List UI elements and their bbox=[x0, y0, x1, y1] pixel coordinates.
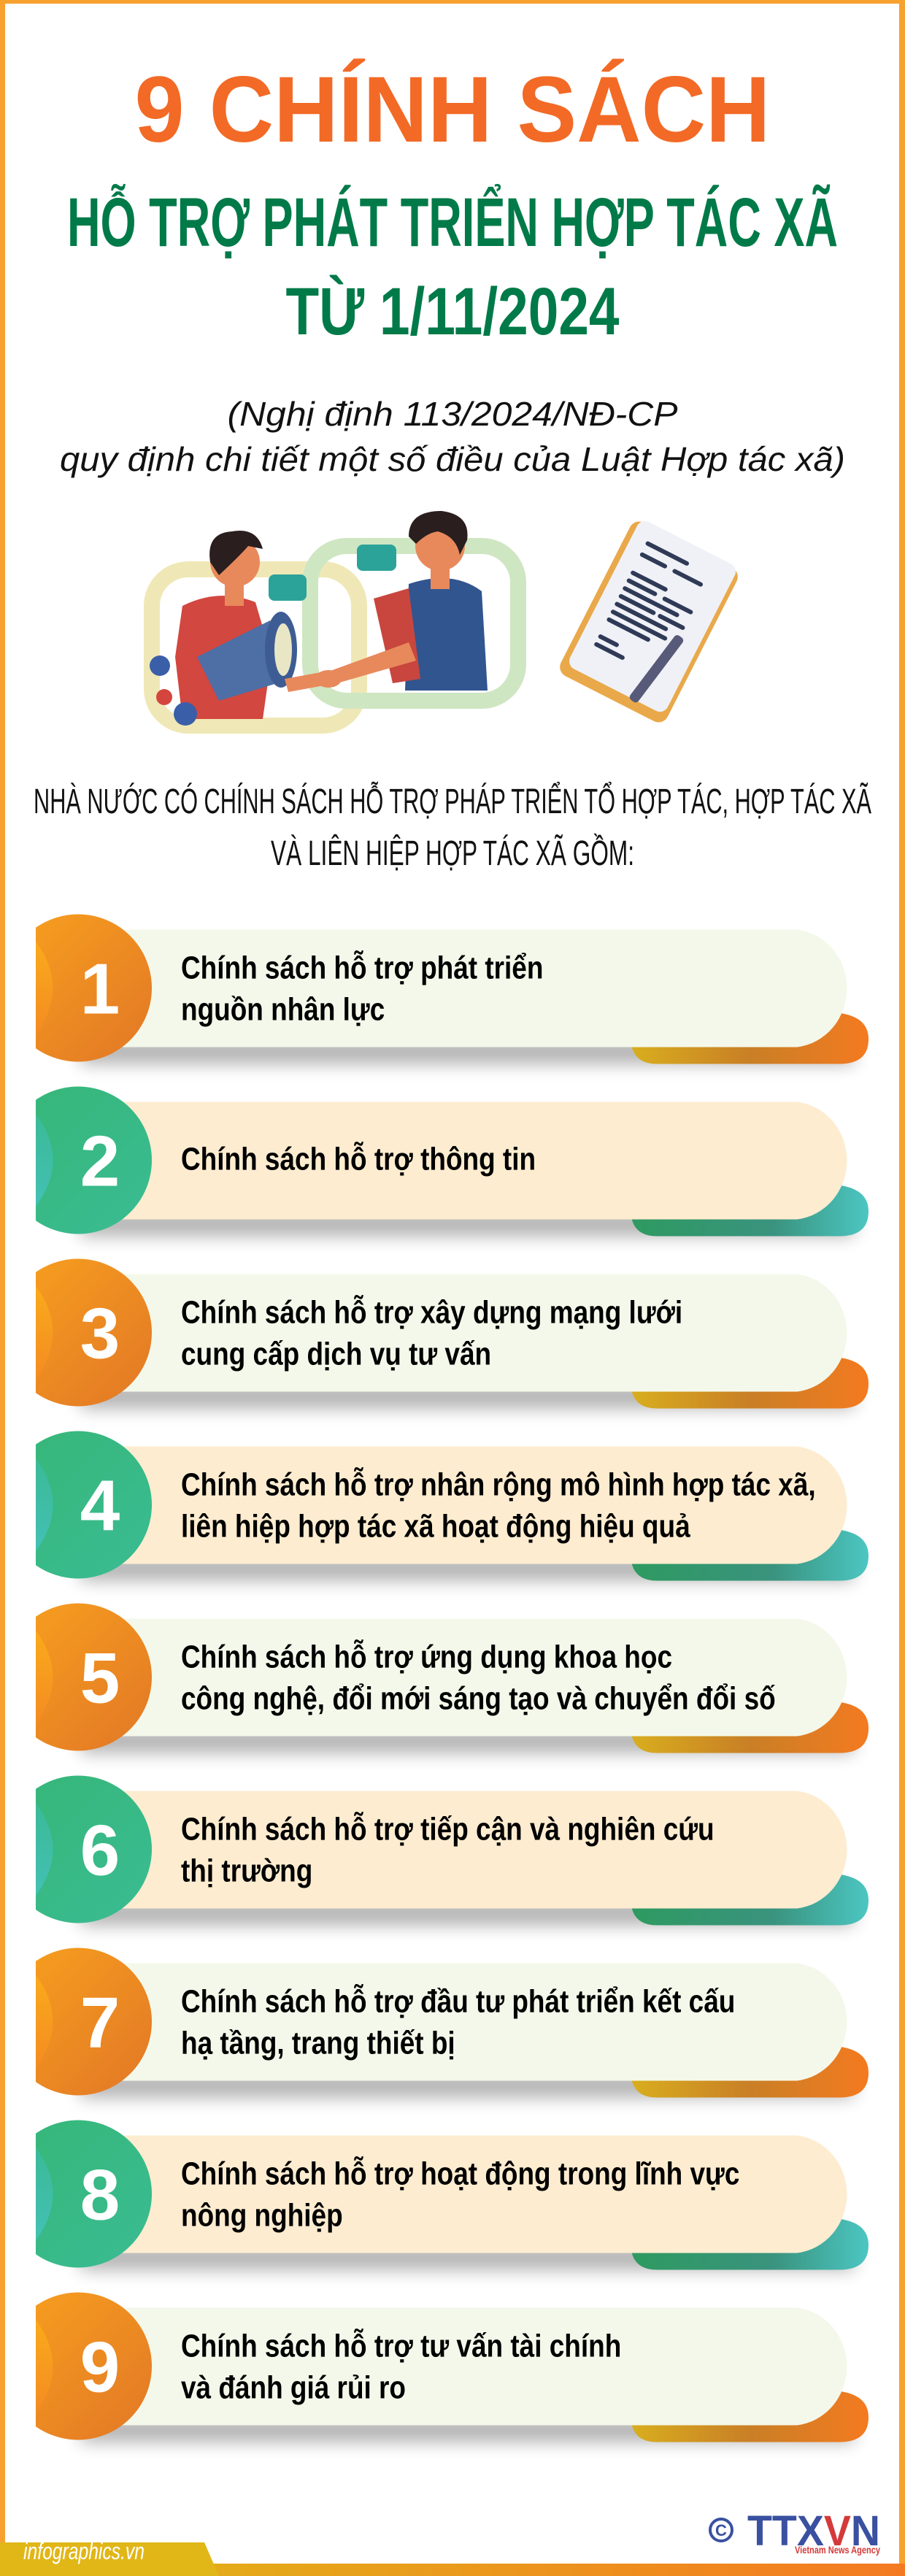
item 7: hạ tầng, trang thiết bị bbox=[181, 2024, 455, 2061]
item 1: Chính sách hỗ trợ phát triển bbox=[181, 949, 543, 985]
logo: TTXVN: TTXVN bbox=[747, 2507, 880, 2555]
item 8: 8 bbox=[80, 2155, 120, 2235]
logo: TTXVN: Vietnam News Agency bbox=[795, 2544, 880, 2556]
subtitle: (Nghị định 113/2024/NĐ-CP bbox=[228, 395, 678, 433]
like icons bbox=[150, 655, 170, 676]
item 8 bbox=[4, 2120, 869, 2270]
item 4 bbox=[4, 1431, 869, 1581]
item 9: 9 bbox=[80, 2327, 120, 2407]
item 4: Chính sách hỗ trợ nhân rộng mô hình hợp tác xã, bbox=[181, 1466, 816, 1502]
item 6 bbox=[4, 1775, 869, 1926]
item 4: 4 bbox=[80, 1466, 120, 1546]
item 3: cung cấp dịch vụ tư vấn bbox=[181, 1335, 491, 1372]
footer bar: infographics.vn bbox=[23, 2538, 145, 2564]
item 6: 6 bbox=[80, 1810, 120, 1891]
item 7: 7 bbox=[80, 1983, 120, 2063]
subtitle bbox=[60, 395, 845, 478]
item 2: 2 bbox=[80, 1121, 120, 1202]
title: 9 CHÍNH SÁCH bbox=[134, 58, 771, 162]
intro text bbox=[34, 781, 871, 873]
item 7: Chính sách hỗ trợ đầu tư phát triển kết cấu bbox=[181, 1983, 735, 2019]
speech bubbles bbox=[269, 574, 307, 601]
item 1: nguồn nhân lực bbox=[181, 991, 385, 1027]
logo: TTXVN: C bbox=[715, 2521, 727, 2540]
item 8: Chính sách hỗ trợ hoạt động trong lĩnh vực bbox=[181, 2155, 739, 2191]
item 1 bbox=[4, 914, 869, 1064]
subtitle: quy định chi tiết một số điều của Luật Hợp tác xã) bbox=[60, 440, 845, 478]
item 3: Chính sách hỗ trợ xây dựng mạng lưới bbox=[181, 1293, 682, 1330]
item 3 bbox=[4, 1258, 869, 1409]
right man bbox=[405, 578, 488, 691]
left man bbox=[175, 596, 272, 719]
item 8: nông nghiệp bbox=[181, 2196, 343, 2233]
item 1: 1 bbox=[80, 949, 120, 1029]
item 6: thị trường bbox=[181, 1852, 312, 1888]
item 9 bbox=[4, 2292, 869, 2442]
item 5: 5 bbox=[80, 1638, 120, 1718]
item 6: Chính sách hỗ trợ tiếp cận và nghiên cứu bbox=[181, 1810, 715, 1847]
item 2 bbox=[4, 1086, 869, 1237]
item 5: Chính sách hỗ trợ ứng dụng khoa học bbox=[181, 1638, 672, 1675]
intro text: VÀ LIÊN HIỆP HỢP TÁC XÃ GỒM: bbox=[271, 833, 634, 873]
illustration: two people shaking hands bbox=[150, 511, 518, 726]
item 5 bbox=[4, 1603, 869, 1753]
item 2: Chính sách hỗ trợ thông tin bbox=[181, 1140, 536, 1177]
item 3: 3 bbox=[80, 1293, 120, 1374]
item 5: công nghệ, đổi mới sáng tạo và chuyển đổi số bbox=[181, 1680, 776, 1716]
illustration: document with pen bbox=[556, 515, 742, 726]
item 7 bbox=[4, 1948, 869, 2098]
title bbox=[67, 58, 838, 349]
item 9: Chính sách hỗ trợ tư vấn tài chính bbox=[181, 2327, 621, 2364]
footer bar bbox=[0, 2538, 905, 2576]
title: TỪ 1/11/2024 bbox=[286, 274, 619, 349]
item 4: liên hiệp hợp tác xã hoạt động hiệu quả bbox=[181, 1507, 690, 1544]
item 9: và đánh giá rủi ro bbox=[181, 2369, 406, 2405]
